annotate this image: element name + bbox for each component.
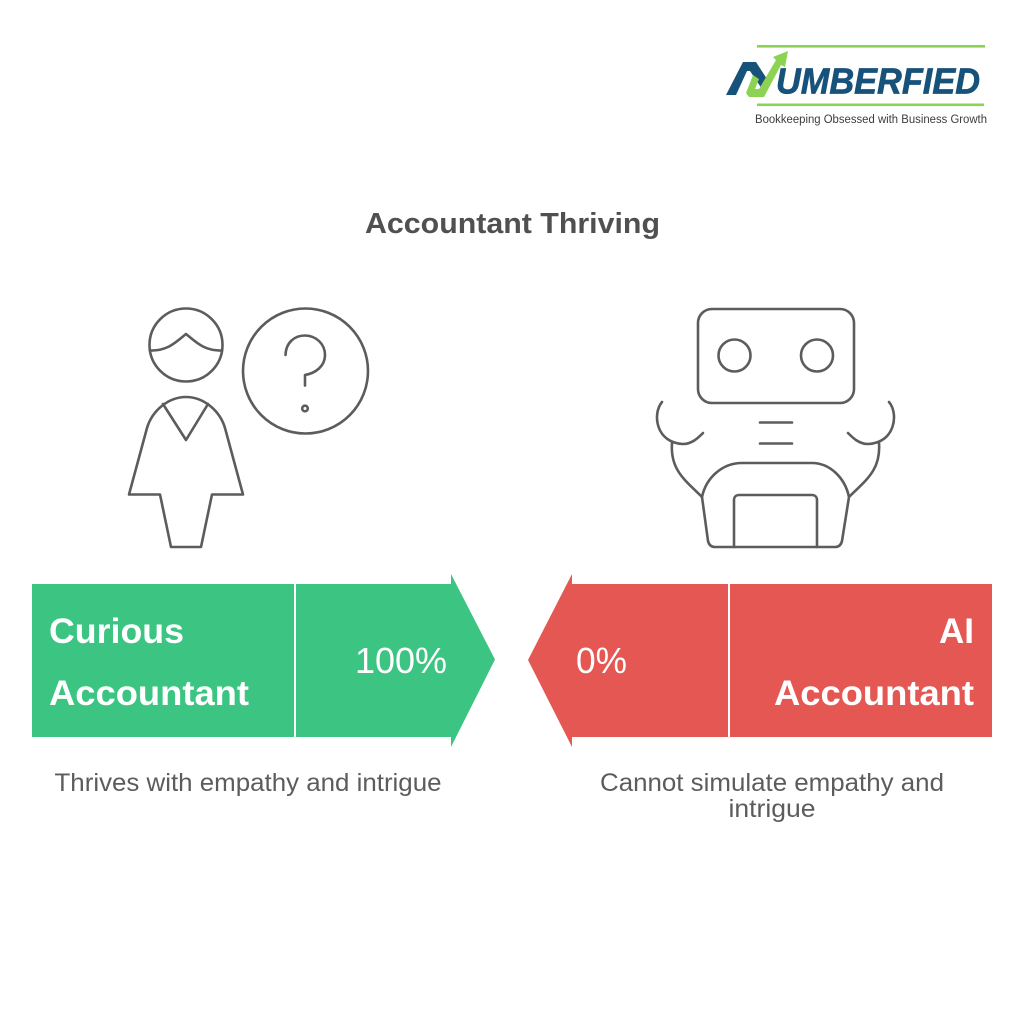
label: Curious Accountant: Curious [49, 612, 184, 651]
logo mark: N with arrow [726, 51, 788, 97]
person body [129, 397, 243, 547]
logo tagline: Bookkeeping Obsessed with Business Growth [755, 114, 987, 126]
logo bottom rule [757, 104, 984, 106]
question bubble [243, 308, 368, 434]
logo top rule [757, 45, 985, 48]
divider [294, 584, 296, 737]
panel: AI accountant arrow [528, 574, 992, 747]
robot chest panel [734, 495, 817, 547]
caption: AI accountant: intrigue [728, 795, 816, 823]
robot body [702, 463, 849, 547]
caption: AI accountant [600, 769, 944, 823]
caption: curious accountant: Thrives with empathy and intrigue [54, 769, 442, 797]
green arrow shape [32, 574, 495, 747]
robot head [698, 309, 854, 403]
robot neck lines [760, 422, 792, 444]
red arrow shape [528, 574, 992, 747]
robot left arm [657, 402, 703, 497]
value: 0%: 0% [576, 640, 627, 681]
panel: curious accountant arrow [32, 574, 495, 747]
value: 100%: 100% [355, 640, 447, 681]
icon: person with question mark [129, 308, 368, 547]
label: AI: AI [939, 612, 974, 651]
robot right arm [848, 402, 894, 497]
logo wordmark: UMBERFIED [776, 60, 980, 102]
logo: Numberfied [726, 45, 987, 126]
person head [150, 308, 222, 382]
title: Accountant Thriving [365, 208, 660, 240]
caption: AI accountant: Cannot simulate empathy and [600, 769, 944, 797]
icon: robot [657, 309, 894, 547]
divider [728, 584, 730, 737]
label line two: Accountant [49, 674, 249, 713]
label: Accountant: Accountant [774, 674, 974, 713]
